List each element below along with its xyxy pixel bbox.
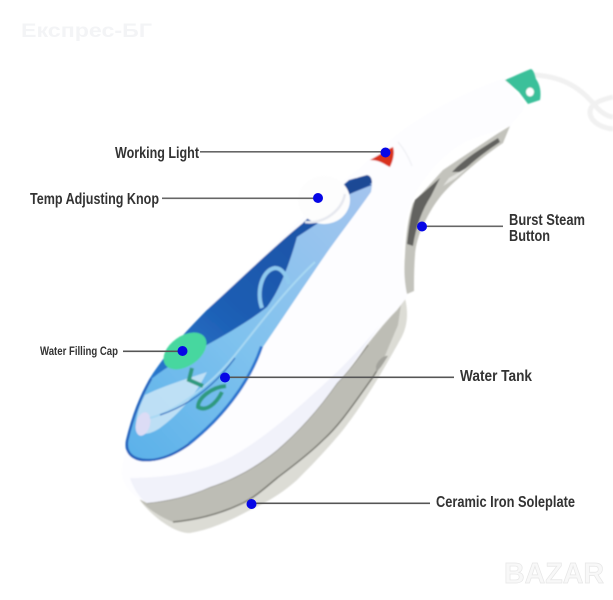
callout: Ceramic Iron Soleplate: Ceramic Iron Soleplate: [436, 494, 575, 511]
hanger hole: [526, 88, 534, 96]
water tank: [124, 174, 373, 462]
soleplate rounded detail: [376, 356, 388, 372]
soleplate outer strip: [140, 298, 407, 533]
tank right rim: [190, 347, 263, 445]
callout: Working Light: [115, 145, 390, 162]
inner hose loop: [260, 268, 289, 308]
callout: Ceramic Iron Soleplate: [246, 494, 575, 511]
white main body and handle: [122, 78, 525, 503]
tank pale highlight: [136, 372, 207, 434]
callout: Temp Adjusting Knop: Temp Adjusting Knop: [30, 191, 159, 208]
callout: Water Filling Cap: [40, 346, 188, 358]
gray soleplate side: [140, 298, 402, 522]
watermark: Bazar: BAZAR: [504, 558, 604, 590]
tank base: [125, 178, 372, 461]
callout: Water Tank: [220, 368, 532, 385]
knob shading: [305, 194, 345, 222]
tank groove line: [160, 358, 235, 415]
callout: Water Tank: Water Tank: [460, 368, 532, 385]
green inner tubes: [189, 368, 226, 409]
callout: Temp Adjusting Knop: [30, 191, 323, 208]
red indicator light: [370, 147, 394, 167]
icon: power cord: [533, 75, 613, 129]
steamer product illustration: [110, 69, 541, 533]
white body soft shading: [130, 325, 380, 503]
green hanger cap: [505, 69, 541, 104]
tank deep blue section: [140, 175, 372, 385]
watermark: Експрес-БГ: Експрес-БГ: [21, 21, 152, 42]
tank top dark window: [346, 174, 373, 194]
tank lower rim: [126, 378, 190, 461]
green filling cap: [157, 325, 213, 377]
callout: Working Light: Working Light: [115, 145, 199, 162]
trigger housing: [404, 126, 510, 294]
tank lavender stopper: [134, 412, 151, 437]
callout: Burst Steam Button: Burst Steam: [509, 212, 585, 229]
trigger dark interior: [407, 138, 500, 246]
callout: Burst Steam Button: Button: [509, 228, 550, 245]
handle seam: [398, 142, 412, 166]
temp knob: [298, 176, 350, 224]
inner tube curve: [150, 262, 315, 418]
callout: Water Filling Cap: Water Filling Cap: [40, 346, 118, 358]
soleplate upper seam: [147, 345, 368, 503]
trigger highlight: [443, 166, 470, 186]
soleplate groove: [173, 364, 381, 522]
callout: Burst Steam Button: [417, 212, 585, 245]
